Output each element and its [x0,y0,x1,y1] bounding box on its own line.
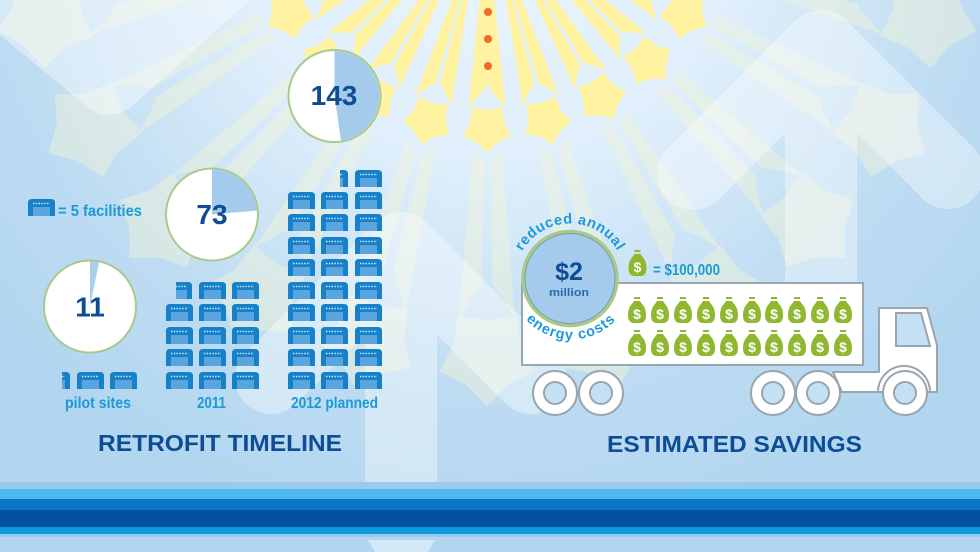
money bags: bottom row: $ [633,339,641,355]
money bags: top row: $ [702,306,710,322]
heading: retrofit timeline: RETROFIT TIMELINE [98,430,342,456]
money bags: bottom row: $ [770,339,778,355]
sun rays and stars [0,0,980,404]
legend: 5 facilities [28,199,142,220]
facility icons: 2011 [165,282,259,389]
savings circle: million [549,287,589,299]
money bags: top row: $ [816,306,824,322]
pie: 2011 73: 73 [196,199,228,230]
savings circle: $2 [555,258,583,286]
legend: 5 facilities: = 5 facilities [58,203,142,220]
label: pilot sites: pilot sites [65,395,131,412]
money bags: bottom row: $ [793,339,801,355]
money bags: bottom row: $ [656,339,664,355]
money bags: bottom row: $ [748,339,756,355]
money bags: bottom row: $ [725,339,733,355]
background arrow tip below stripes [368,540,435,552]
money bags: top row: $ [770,306,778,322]
pie: 2011 73 [166,168,258,260]
money bags: bottom row: $ [679,339,687,355]
orange dots [484,8,492,70]
label: 2011: 2011 [197,395,226,412]
money bags: bottom row [628,330,852,356]
pie: 2012 143: 143 [311,80,357,111]
label: 2012 planned: 2012 planned [291,395,378,412]
money bags: top row: $ [793,306,801,322]
money bags: bottom row: $ [816,339,824,355]
truck [522,283,937,415]
legend: $100,000: $ [634,259,642,275]
background arrow: right [693,46,948,300]
money bags: top row: $ [725,306,733,322]
legend: $100,000: = $100,000 [653,262,720,279]
money bags: top row: $ [679,306,687,322]
money bags: top row: $ [633,306,641,322]
heading: estimated savings: ESTIMATED SAVINGS [607,431,862,457]
pie: 2012 143 [288,50,380,142]
truck trailer [522,283,863,365]
facility icons: 2012 planned [288,170,382,389]
background arrow: top left [0,0,250,115]
money bags: top row [628,297,852,323]
bottom stripes [0,482,980,537]
pie: pilot sites 11: 11 [75,292,105,322]
facility icons: pilot sites [43,372,137,389]
truck wheels [533,371,927,415]
money bags: top row: $ [656,306,664,322]
curved label: energy costs: energy costs [528,316,614,342]
background arrow: center [271,248,531,482]
money bags: top row: $ [839,306,847,322]
truck cab [833,308,937,392]
savings circle [523,232,617,326]
money bags: bottom row: $ [702,339,710,355]
money bags: top row: $ [748,306,756,322]
legend: $100,000 [628,250,720,279]
curved label: reduced annual: reduced annual [516,213,626,250]
money bags: bottom row: $ [839,339,847,355]
pie: pilot sites 11 [44,260,136,352]
